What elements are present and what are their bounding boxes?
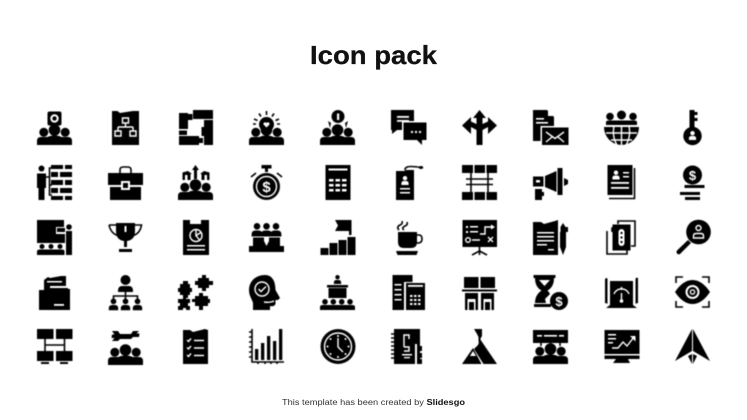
icon: team growth arrows <box>178 165 213 200</box>
icon: desks with monitors <box>462 277 497 310</box>
icon: trophy <box>109 223 142 252</box>
icon: dollar coin stack: $ <box>689 168 697 183</box>
icon: spiral notebook <box>391 329 422 364</box>
icon: team gear <box>37 112 72 145</box>
icon: number one team <box>320 110 355 145</box>
icon: briefcase <box>108 167 143 200</box>
icon: resume pages <box>608 165 634 198</box>
title: Icon pack <box>310 40 438 70</box>
icon: clipboard pie <box>183 220 209 255</box>
icon: person and wall <box>37 165 72 200</box>
icon: dollar coin stack <box>680 166 704 200</box>
icon: brick network <box>462 165 497 200</box>
icon: puzzle pieces <box>178 275 213 310</box>
icon: hourglass with dollar <box>534 275 568 310</box>
icon: clipboard org chart <box>112 110 139 145</box>
icon: hourglass with dollar: $ <box>555 294 563 309</box>
icon: money stack <box>607 221 635 254</box>
icon: wrench team <box>108 331 143 365</box>
icon: strategy board <box>462 220 497 255</box>
icon: paper plane <box>675 329 710 364</box>
icon: focus eye <box>675 277 710 307</box>
icon: coffee cup <box>396 221 422 255</box>
icon: checklist clipboard <box>183 329 208 364</box>
icon: mountain flag <box>462 329 497 364</box>
icon: global team <box>604 110 639 145</box>
icon: growth monitor <box>604 330 640 363</box>
icon: key person <box>683 110 702 145</box>
icon: document and pen <box>533 220 568 255</box>
icon: speaker and audience <box>320 275 355 310</box>
icon: hierarchy <box>109 275 142 310</box>
icon: monitor network <box>37 329 72 364</box>
icon: bar chart <box>249 329 284 364</box>
icon: calculator <box>326 165 350 200</box>
icon: dollar stopwatch: $ <box>262 179 271 196</box>
icon: document and mail <box>533 110 569 146</box>
icon: idea bulb team <box>249 111 284 145</box>
icon: head with check <box>249 275 280 310</box>
icon: clock <box>320 329 356 364</box>
icon: megaphone <box>533 168 568 200</box>
icon: three way arrows <box>462 110 497 145</box>
icon: team on podium <box>249 223 284 252</box>
icon: id tag <box>396 166 423 200</box>
icon: presentation board <box>37 220 72 255</box>
icon: dollar stopwatch <box>251 165 282 200</box>
icon: banner team <box>533 330 568 364</box>
icon: chat bubbles <box>391 110 428 145</box>
icon: folder with paper <box>39 276 70 310</box>
icon: buildings with calculator <box>392 275 425 310</box>
footer credit: This template has been created by Slidesgo <box>282 398 465 407</box>
icon: bars and flag <box>320 220 356 255</box>
icon: person magnifier <box>676 220 711 254</box>
icon: gauge scroll <box>605 278 638 308</box>
icon: handshake square <box>179 110 213 145</box>
